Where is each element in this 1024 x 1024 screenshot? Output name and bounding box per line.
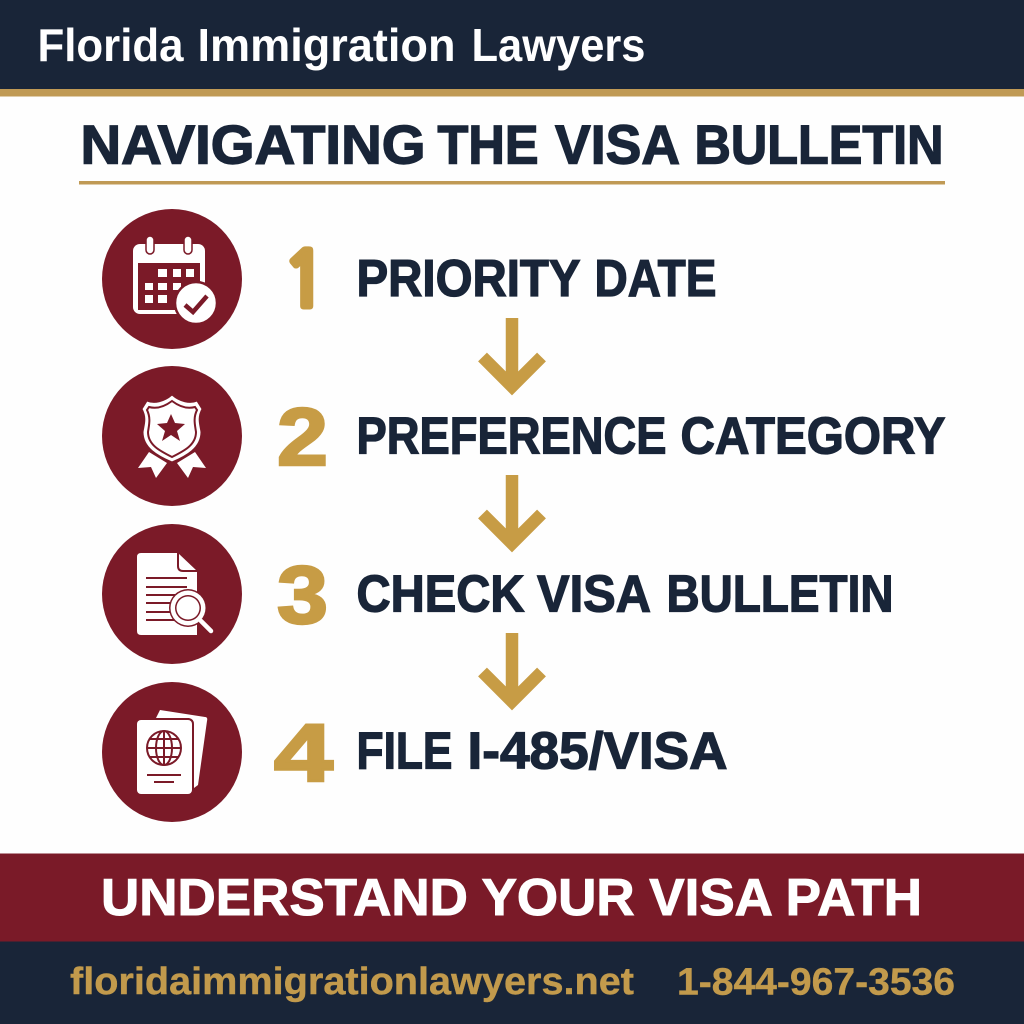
label: priority date <box>356 250 716 308</box>
label: priority date: PRIORITY <box>356 250 580 308</box>
banner text: UNDERSTAND YOUR VISA PATH <box>101 869 922 927</box>
step 2: preference category <box>102 366 946 506</box>
label: file i-485/visa: FILE <box>356 722 452 780</box>
phone number: 1-844-967-3536 <box>677 962 955 1004</box>
icon: shield badge with ribbons <box>102 366 242 506</box>
label: file i-485/visa <box>356 722 728 780</box>
number 4: 4 <box>274 708 334 799</box>
step 1: priority date <box>102 209 716 349</box>
arrow 3 to 4 <box>482 633 542 703</box>
label: preference category <box>356 408 946 466</box>
footer contact band <box>0 942 1024 1024</box>
title <box>79 114 945 184</box>
title: BULLETIN <box>694 114 944 176</box>
icon: passports with globe <box>102 682 242 822</box>
label: priority date: DATE <box>594 250 716 308</box>
header brand name <box>38 19 646 71</box>
title: NAVIGATING <box>80 114 426 176</box>
arrow 2 to 3 <box>482 475 542 545</box>
header brand name: Lawyers <box>472 19 646 71</box>
website: floridaimmigrationlawyers.net <box>70 961 634 1003</box>
number 2: 2 <box>277 392 328 483</box>
label: check visa bulletin <box>356 566 894 624</box>
number 3: 3 <box>277 550 328 641</box>
icon: calendar with check <box>102 209 242 349</box>
label: preference category: CATEGORY <box>680 408 946 466</box>
title: VISA <box>555 114 680 176</box>
label: check visa bulletin: VISA <box>537 566 651 624</box>
label: check visa bulletin: BULLETIN <box>666 566 894 624</box>
label: file i-485/visa: I-485/VISA <box>468 722 728 780</box>
label: check visa bulletin: CHECK <box>356 566 525 624</box>
call to action banner <box>0 854 1024 942</box>
header brand name: Immigration <box>198 19 456 71</box>
number 1: 1 <box>282 244 328 319</box>
title: THE <box>438 114 538 176</box>
arrow 1 to 2 <box>482 318 542 388</box>
header band <box>0 0 1024 96</box>
label: preference category: PREFERENCE <box>356 408 666 466</box>
icon: document with magnifier <box>102 524 242 664</box>
step 3: check visa bulletin <box>102 524 894 664</box>
header brand name: Florida <box>38 19 184 71</box>
step 4: file i-485/visa <box>102 682 728 822</box>
